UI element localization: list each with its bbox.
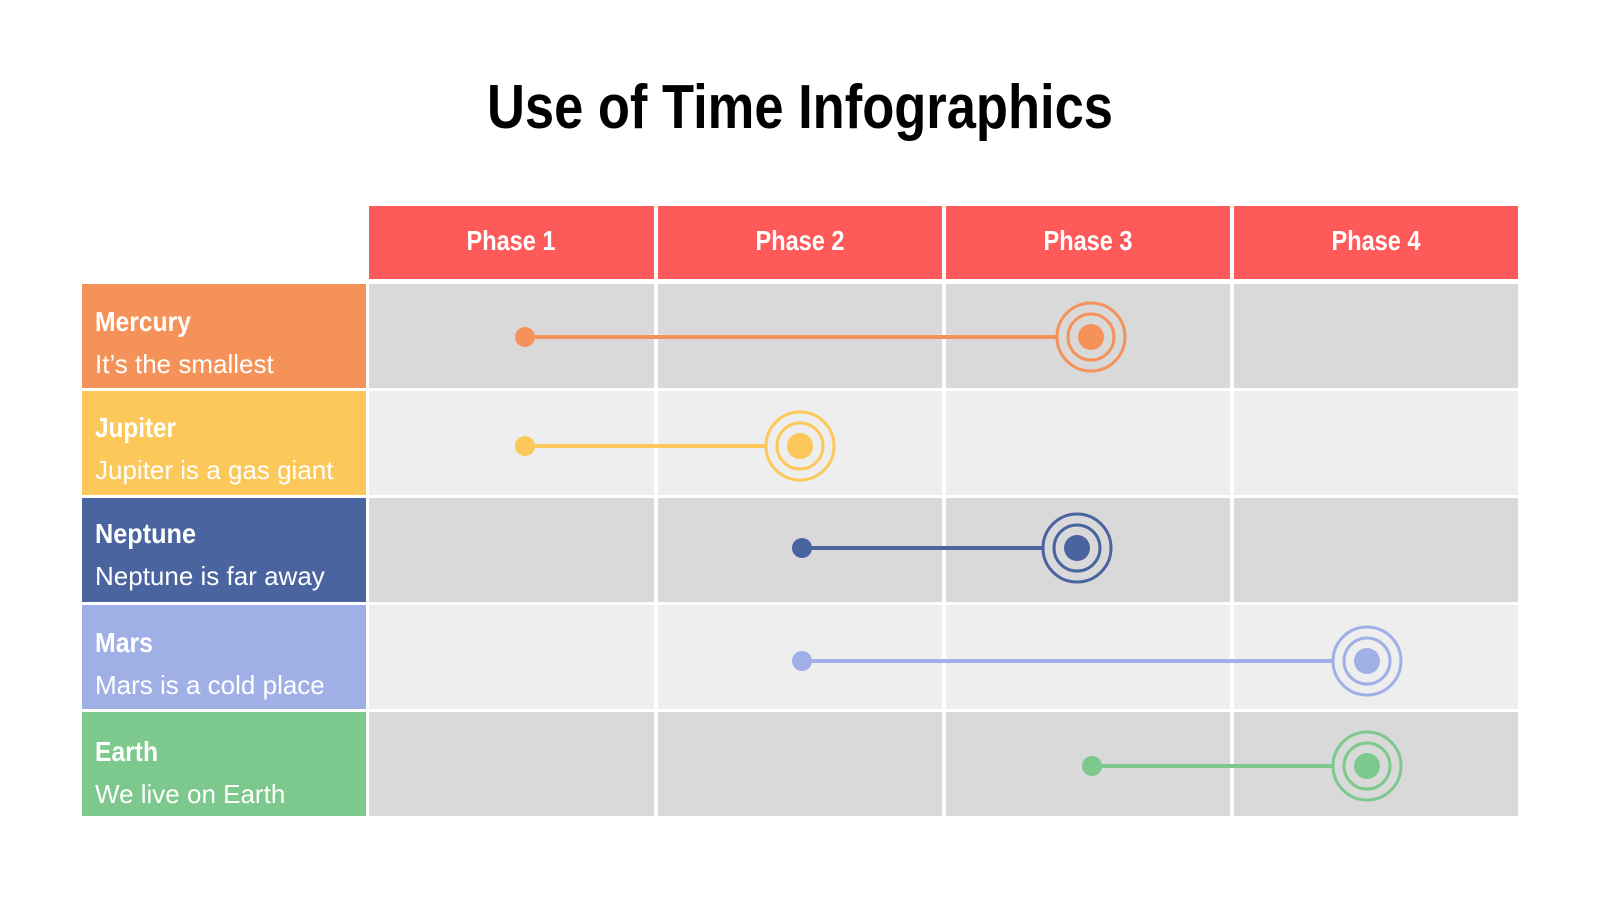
row label: Jupiter: Jupiter is a gas giant xyxy=(95,455,334,485)
header row: Phase 2 xyxy=(756,225,844,256)
header row: Phase 3 xyxy=(1044,225,1132,256)
row label: Neptune xyxy=(82,498,366,602)
row label: Mercury xyxy=(82,284,366,388)
row label: Earth: Earth xyxy=(95,736,158,767)
title: Use of Time Infographics xyxy=(487,73,1113,142)
row label: Mars: Mars is a cold place xyxy=(95,670,325,700)
row label: Mercury: It’s the smallest xyxy=(95,349,274,379)
header row: Phase 1 xyxy=(466,225,556,256)
row label: Jupiter: Jupiter xyxy=(95,412,176,443)
grid cells xyxy=(369,284,1518,816)
row label: Neptune: Neptune xyxy=(95,518,196,549)
row label: Neptune: Neptune is far away xyxy=(95,561,325,591)
header row xyxy=(369,206,1518,279)
timeline: Mars xyxy=(792,627,1401,695)
timeline: Earth xyxy=(1082,732,1401,800)
timeline: Mercury xyxy=(515,303,1125,371)
timeline: Neptune xyxy=(792,514,1111,582)
row label: Mars xyxy=(82,605,366,709)
row label: Earth: We live on Earth xyxy=(95,779,285,809)
row label: Mercury: Mercury xyxy=(95,306,191,337)
row label: Mars: Mars xyxy=(95,627,153,658)
header row: Phase 4 xyxy=(1332,225,1421,256)
timeline: Jupiter xyxy=(515,412,834,480)
row label: Jupiter xyxy=(82,391,366,495)
row label: Earth xyxy=(82,712,366,816)
